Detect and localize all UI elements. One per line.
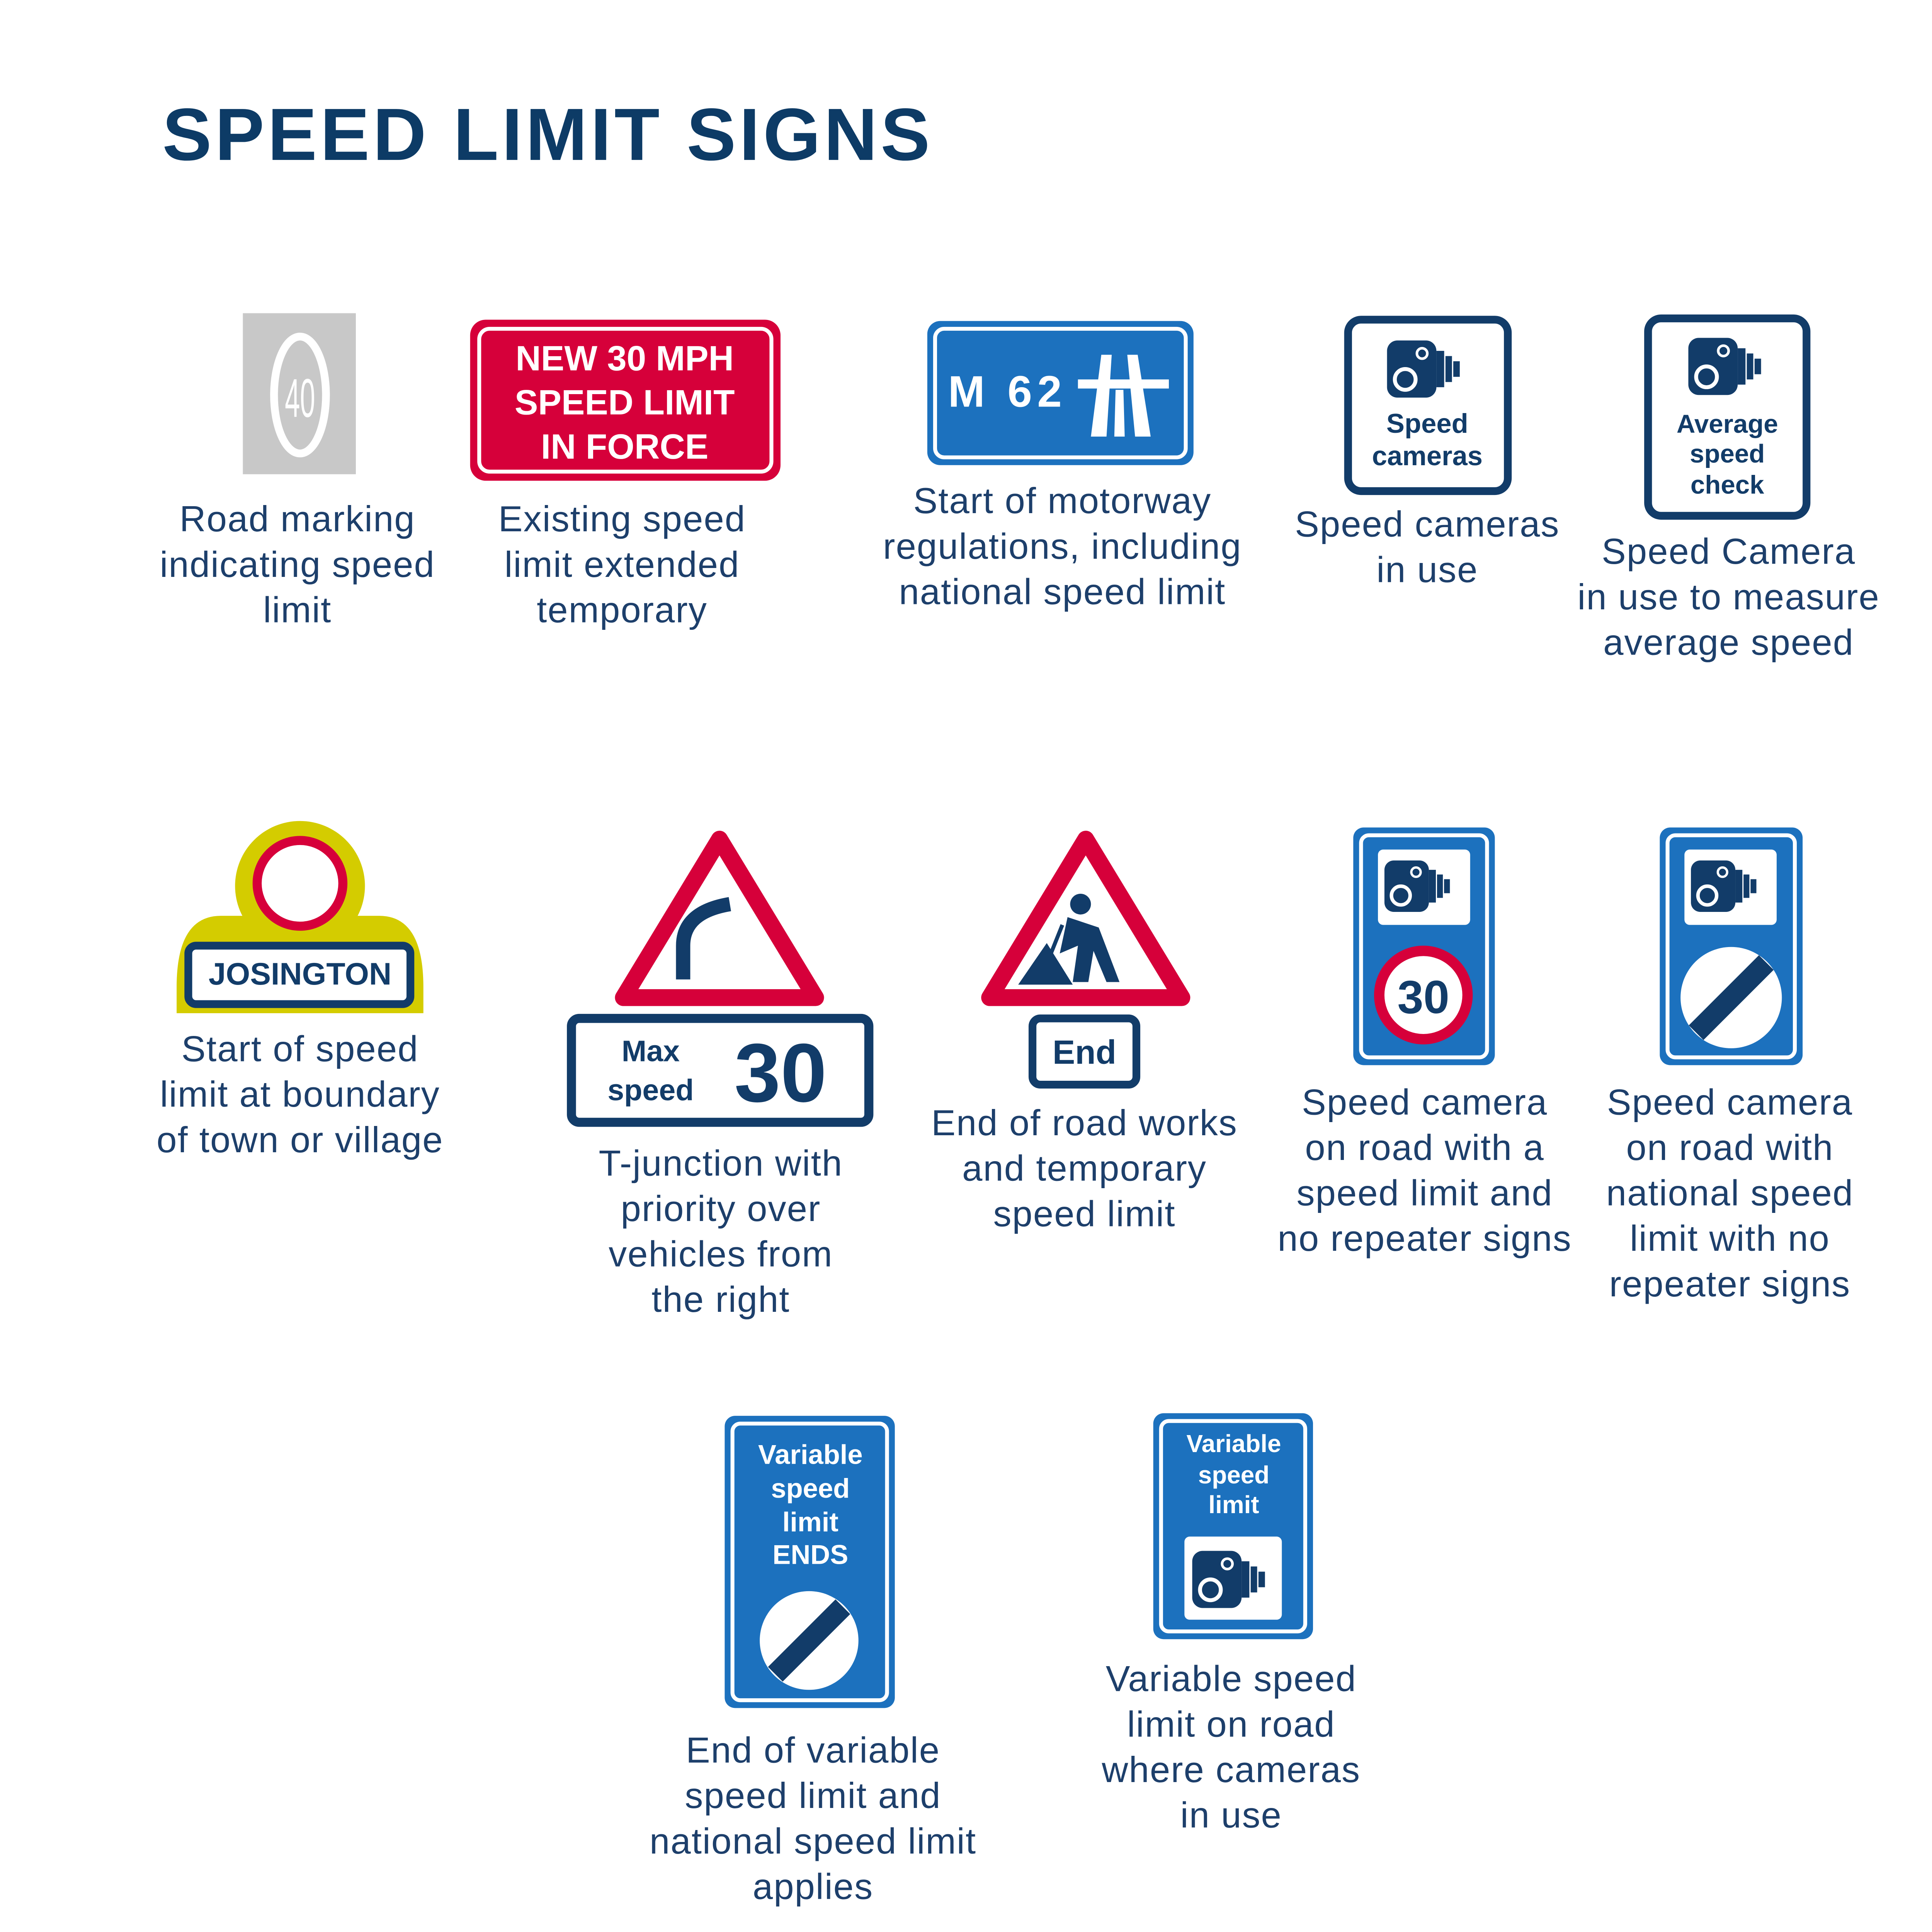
panel: new 30 mph [470, 320, 781, 630]
panel: road works end [931, 839, 1238, 1234]
caption: in use [1376, 549, 1478, 590]
panel: speed cameras [1295, 320, 1560, 590]
caption: limit [263, 589, 332, 630]
caption: on road with a [1305, 1127, 1544, 1168]
icon: variable speed limit ends sign: limit [782, 1507, 838, 1537]
caption: Speed camera [1607, 1082, 1853, 1122]
icon: average speed check sign: Average [1677, 410, 1778, 439]
icon: variable speed limit ends sign: ENDS [772, 1539, 848, 1570]
caption: the right [651, 1279, 790, 1320]
caption: Speed cameras [1295, 504, 1560, 544]
icon: speed cameras sign: cameras [1372, 440, 1483, 471]
title: SPEED LIMIT SIGNS [162, 93, 933, 176]
icon: junction triangle and max speed: Max [622, 1035, 680, 1068]
panel: variable cameras [1102, 1413, 1361, 1835]
icon: speed cameras sign [1348, 320, 1508, 491]
caption: limit extended [505, 544, 740, 585]
icon: camera national limit sign [1660, 828, 1803, 1065]
caption: Variable speed [1106, 1658, 1357, 1699]
icon: junction triangle and max speed: speed [607, 1073, 694, 1107]
icon: variable speed limit camera sign: Variable [1187, 1430, 1281, 1458]
caption: on road with [1626, 1127, 1833, 1168]
caption: of town or village [156, 1119, 444, 1160]
icon: average speed check sign: check [1690, 471, 1764, 500]
caption: indicating speed [160, 544, 435, 585]
icon: road marking 40: 40 [285, 367, 315, 429]
caption: where cameras [1102, 1749, 1361, 1790]
icon: red sign: NEW 30 MPH [515, 339, 734, 378]
caption: temporary [537, 589, 707, 630]
icon: camera 30 sign: 30 [1397, 971, 1449, 1023]
caption: national speed limit [899, 571, 1226, 612]
caption: Existing speed [498, 498, 746, 539]
caption: limit on road [1127, 1704, 1335, 1744]
caption: End of road works [931, 1102, 1238, 1143]
caption: limit with no [1630, 1218, 1830, 1259]
caption: vehicles from [609, 1234, 833, 1274]
panel: camera with 30 [1277, 828, 1572, 1259]
icon: average speed check sign: speed [1690, 439, 1765, 468]
icon: average speed check sign [1648, 318, 1806, 516]
caption: and temporary [962, 1148, 1207, 1189]
panel: average speed [1577, 318, 1880, 663]
caption: speed limit and [1296, 1173, 1553, 1213]
caption: applies [753, 1866, 873, 1906]
caption: speed limit [993, 1193, 1176, 1234]
caption: T-junction with [599, 1143, 843, 1183]
icon: red sign: SPEED LIMIT [515, 383, 735, 422]
panel: motorway [883, 321, 1242, 612]
icon: town boundary sign: JOSINGTON [209, 957, 391, 992]
icon: variable speed limit ends sign: Variable [758, 1439, 863, 1469]
caption: average speed [1603, 622, 1854, 663]
panel: variable ends [650, 1416, 976, 1906]
icon: red sign [470, 320, 781, 481]
icon: variable speed limit ends sign: speed [771, 1473, 850, 1503]
icon: M62 sign: M 62 [948, 367, 1067, 417]
icon: variable speed limit camera sign: limit [1208, 1491, 1259, 1519]
caption: End of variable [686, 1730, 940, 1770]
caption: no repeater signs [1277, 1218, 1572, 1259]
icon: road marking 40 [243, 313, 356, 474]
caption: national speed [1606, 1173, 1854, 1213]
icon: variable speed limit camera sign [1153, 1413, 1313, 1639]
panel: josington [156, 821, 444, 1160]
caption: national speed limit [650, 1821, 976, 1861]
caption: regulations, including [883, 526, 1242, 566]
panel: t-junction [571, 839, 869, 1320]
caption: Speed camera [1302, 1082, 1548, 1122]
panel: camera national [1606, 828, 1854, 1304]
caption: priority over [621, 1188, 821, 1229]
caption: repeater signs [1609, 1264, 1850, 1304]
icon: town boundary sign [177, 821, 423, 1013]
caption: Start of speed [181, 1029, 418, 1069]
caption: Road marking [180, 498, 415, 539]
icon: M62 sign [927, 321, 1194, 465]
icon: speed cameras sign: Speed [1386, 408, 1468, 439]
caption: in use to measure [1577, 577, 1880, 617]
caption: limit at boundary [160, 1074, 440, 1114]
panel: road marking [160, 313, 435, 630]
icon: camera 30 sign [1353, 828, 1495, 1065]
icon: variable speed limit camera sign: speed [1198, 1461, 1269, 1489]
icon: variable speed limit ends sign [724, 1416, 895, 1708]
caption: speed limit and [685, 1775, 941, 1816]
icon: junction triangle and max speed [571, 839, 869, 1122]
icon: red sign: IN FORCE [541, 427, 708, 466]
caption: in use [1180, 1795, 1282, 1835]
caption: Speed Camera [1602, 531, 1855, 571]
caption: Start of motorway [913, 480, 1211, 521]
icon: junction triangle and max speed: 30 [734, 1026, 827, 1119]
icon: road works triangle: End [1053, 1033, 1116, 1071]
icon: road works triangle [990, 839, 1182, 1085]
